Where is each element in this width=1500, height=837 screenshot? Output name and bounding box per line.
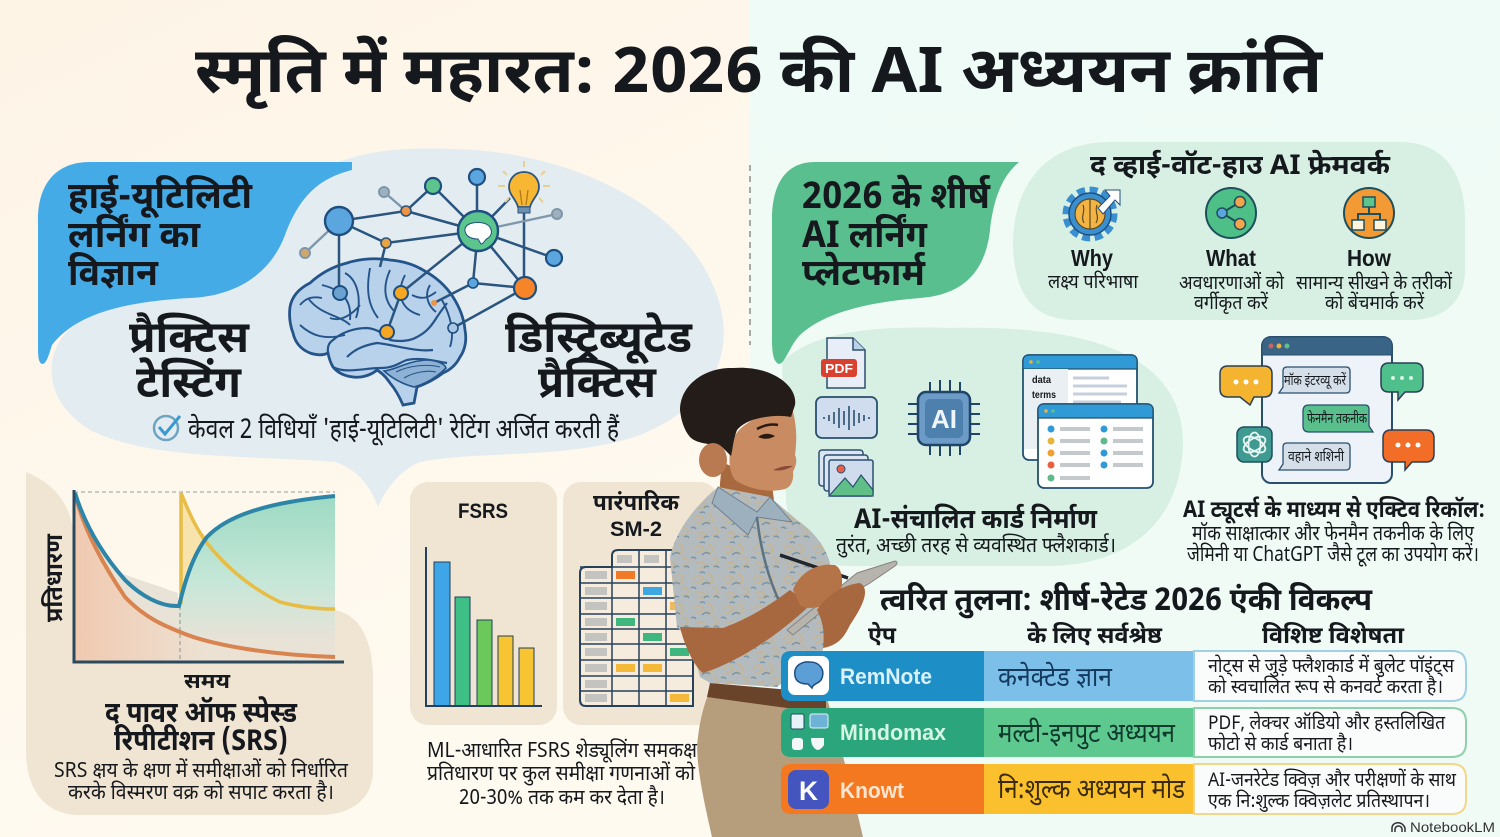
text: FSRS explanation xyxy=(427,738,698,813)
chat bubble: third prompt xyxy=(1279,443,1350,470)
icon: AI chip: AI xyxy=(931,404,957,434)
icon: flashcard windows: data xyxy=(1032,375,1051,386)
row: RemNote: को स्वचालित रूप से कनवर्ट करता है। xyxy=(1208,675,1443,701)
chat window illustration xyxy=(1262,337,1392,483)
boy tablet xyxy=(787,561,897,635)
panel: platforms heading: 2026 के शीर्ष xyxy=(802,174,991,224)
boy forearm xyxy=(680,590,810,673)
column: what: वर्गीकृत करें xyxy=(1194,291,1269,317)
column headers: ऐप xyxy=(868,623,897,653)
column: what: What xyxy=(1206,245,1256,271)
column: how xyxy=(1296,245,1453,317)
panel: SM-2 xyxy=(563,482,718,725)
x axis label: समय xyxy=(184,669,231,697)
boy neck xyxy=(718,462,775,508)
label: distributed practice: प्रैक्टिस xyxy=(538,356,657,415)
column headers: विशिष्ट विशेषता xyxy=(1262,623,1405,653)
panel background xyxy=(26,472,373,815)
description: SRS क्षय के क्षण में समीक्षाओं को निर्धारित xyxy=(54,758,349,786)
text: FSRS explanation: ML-आधारित FSRS शेड्यूलिंग समकक्ष xyxy=(427,738,698,766)
row: RemNote: कनेक्टेड ज्ञान xyxy=(998,661,1113,698)
text: FSRS explanation: 20-30% तक कम कर देता है। xyxy=(459,784,665,813)
panel: platforms heading xyxy=(772,162,1019,364)
heading text xyxy=(68,174,253,301)
panel: AI tutors xyxy=(1183,337,1485,570)
heading text: विज्ञान xyxy=(68,252,159,301)
column: what xyxy=(1179,245,1285,317)
boy trousers xyxy=(697,695,863,837)
panel heading: रिपीटीशन (SRS) xyxy=(114,724,288,762)
icon: green bubble xyxy=(1381,363,1423,400)
callout: only two methods: केवल 2 विधियाँ 'हाई-यूटिलिटी' रेटिंग अर्जित करती हैं xyxy=(188,413,620,450)
label: distributed practice xyxy=(505,311,693,415)
icon: pdf: PDF xyxy=(825,361,853,376)
description: करके विस्मरण वक्र को सपाट करता है। xyxy=(68,779,334,808)
row: Knowt xyxy=(781,764,1466,815)
icon: AI chip xyxy=(908,380,980,456)
SM-2 heading xyxy=(593,490,680,541)
column: why: लक्ष्य परिभाषा xyxy=(1048,271,1139,296)
label: distributed practice: डिस्ट्रिब्यूटेड xyxy=(505,311,693,370)
icon: Knowt K xyxy=(788,770,829,809)
panel: platforms heading: AI लर्निंग xyxy=(802,213,928,263)
chat bubble: Feynman technique xyxy=(1303,405,1373,432)
panel heading: द पावर ऑफ स्पेस्ड xyxy=(105,695,297,734)
neural network xyxy=(300,169,562,339)
icon: why gear xyxy=(1066,190,1120,238)
row: Knowt: Knowt xyxy=(840,778,905,803)
icon: pdf xyxy=(821,338,865,388)
icon: Mindomax inputs xyxy=(791,714,828,750)
forgetting curve chart xyxy=(74,490,344,662)
description xyxy=(54,758,349,808)
heading text: लर्निंग का xyxy=(68,213,201,263)
FSRS heading: FSRS xyxy=(458,500,508,523)
column: why: Why xyxy=(1071,245,1113,271)
card creation caption: तुरंत, अच्छी तरह से व्यवस्थित फ्लैशकार्ड। xyxy=(836,532,1116,561)
row: Knowt: नि:शुल्क अध्ययन मोड xyxy=(998,774,1185,810)
icon: what share xyxy=(1206,188,1256,238)
column headers xyxy=(868,622,1405,653)
row: Knowt: AI-जनरेटेड क्विज़ और परीक्षणों के साथ xyxy=(1208,768,1456,794)
row: Mindomax: फोटो से कार्ड बनाता है। xyxy=(1208,732,1353,758)
boy collar xyxy=(712,487,792,535)
icon: flashcard windows xyxy=(1023,355,1153,488)
watermark: NotebookLM: NotebookLM xyxy=(1410,819,1495,835)
y axis label: प्रतिधारण xyxy=(42,533,72,622)
panel: spaced repetition xyxy=(26,472,373,815)
panel: platforms heading: प्लेटफार्म xyxy=(802,251,926,301)
panel: FSRS xyxy=(410,482,557,725)
card creation caption xyxy=(836,503,1116,561)
row: Mindomax: मल्टी-इनपुट अध्ययन xyxy=(998,718,1176,754)
panel: framework bubble xyxy=(1013,142,1465,320)
tutors caption xyxy=(1183,496,1485,570)
brain illustration xyxy=(290,259,466,405)
bar chart xyxy=(426,547,542,706)
boy stylus xyxy=(780,555,848,578)
column headers: के लिए सर्वश्रेष्ठ xyxy=(1027,622,1163,653)
chat bubble: mock interview xyxy=(1279,367,1350,393)
chat bubble: third prompt: वहाने शशिनी xyxy=(1288,447,1344,467)
icon: audio xyxy=(816,397,877,438)
boy shirt xyxy=(670,487,830,687)
column: how: को बेंचमार्क करें xyxy=(1325,291,1425,317)
row: Mindomax: Mindomax xyxy=(840,720,947,745)
label: practice testing xyxy=(129,311,250,415)
SM-2 heading: पारंपारिक xyxy=(593,490,680,519)
speech bubble background xyxy=(52,149,724,507)
row: Knowt: एक नि:शुल्क क्विज़लेट प्रतिस्थापन। xyxy=(1208,789,1430,815)
row: RemNote: नोट्स से जुड़े फ्लैशकार्ड में बुलेट पॉइंट्स xyxy=(1208,654,1455,680)
SM-2 heading: SM-2 xyxy=(610,518,662,541)
illustration: boy with tablet xyxy=(670,368,897,837)
icon: yellow bubble xyxy=(1220,366,1272,405)
icon: flashcard windows: terms xyxy=(1032,390,1056,401)
label: practice testing: टेस्टिंग xyxy=(136,356,242,415)
icon: orange bubble xyxy=(1383,430,1434,470)
column: why xyxy=(1048,245,1139,296)
heading text: हाई-यूटिलिटी xyxy=(68,174,253,224)
text: FSRS explanation: प्रतिधारण पर कुल समीक्षा गणनाओं को xyxy=(427,761,696,789)
panel heading xyxy=(105,695,297,762)
boy button placket xyxy=(757,517,790,622)
icon: Knowt K: K xyxy=(799,776,818,806)
icon: RemNote brain xyxy=(788,656,829,695)
title: स्मृति में महारत: 2026 की AI अध्ययन क्रांति xyxy=(195,35,1323,118)
heading tab xyxy=(38,162,352,364)
panel: science of high-utility learning xyxy=(38,149,724,507)
comparison heading: त्वरित तुलना: शीर्ष-रेटेड 2026 एंकी विकल्प xyxy=(880,582,1373,623)
row: RemNote: RemNote xyxy=(840,664,932,689)
schedule grid xyxy=(580,550,693,706)
boy head xyxy=(680,368,796,491)
label: practice testing: प्रैक्टिस xyxy=(129,311,250,370)
row: Mindomax: PDF, लेक्चर ऑडियो और हस्तलिखित xyxy=(1208,711,1446,737)
card creation caption: AI-संचालित कार्ड निर्माण xyxy=(854,503,1098,540)
panel: AI card creation xyxy=(782,327,1183,566)
column: what: अवधारणाओं को xyxy=(1179,271,1285,297)
icon: images xyxy=(819,450,873,496)
boy belt xyxy=(707,683,826,708)
icon: check mark xyxy=(154,416,180,440)
framework heading: द व्हाई-वॉट-हाउ AI फ्रेमवर्क xyxy=(1090,149,1391,186)
column: how: How xyxy=(1347,245,1391,271)
column: how: सामान्य सीखने के तरीकों xyxy=(1296,271,1453,297)
comparison table xyxy=(781,622,1466,815)
chat bubble: mock interview: मॉक इंटरव्यू करें xyxy=(1284,372,1347,391)
icon: light bulb xyxy=(498,161,550,213)
icon: chatgpt knot xyxy=(1237,427,1272,462)
boy hands xyxy=(793,565,865,648)
row: RemNote xyxy=(781,651,1466,701)
icon: how hierarchy xyxy=(1344,188,1394,238)
row: Mindomax xyxy=(781,708,1466,758)
chat bubble: Feynman technique: फेनमैन तकनीक xyxy=(1307,409,1368,429)
